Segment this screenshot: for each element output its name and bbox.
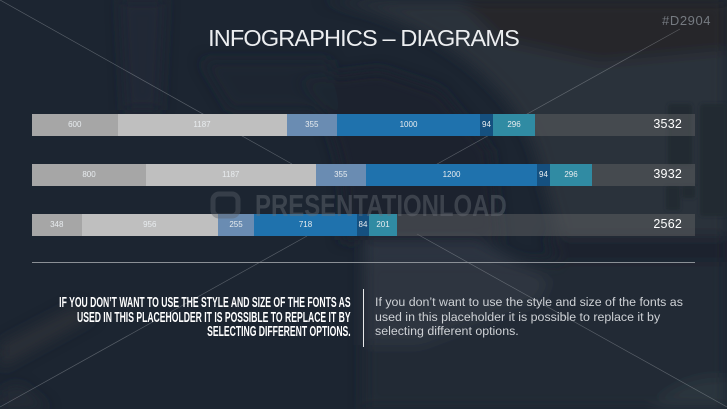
- segment 296: [493, 114, 535, 136]
- regular text block: [375, 295, 683, 338]
- segment 956: [82, 214, 218, 236]
- segment 201: 201: [376, 220, 390, 229]
- segment 296: 296: [564, 170, 578, 179]
- horizontal divider: [32, 262, 695, 263]
- segment 1187: [146, 164, 316, 186]
- segment 94: 94: [482, 120, 491, 129]
- segment 94: 94: [539, 170, 548, 179]
- segment 1200: [366, 164, 537, 186]
- segment 1000: [337, 114, 480, 136]
- segment 956: 956: [143, 220, 156, 229]
- watermark text: PRESENTATIONLOAD: [255, 188, 507, 223]
- segment 94: [537, 164, 550, 186]
- segment 1000: 1000: [400, 120, 417, 129]
- bar row 2: [32, 164, 695, 186]
- segment 296: [550, 164, 592, 186]
- vertical divider: [363, 289, 364, 347]
- segment 600: 600: [68, 120, 81, 129]
- segment 718: [254, 214, 357, 236]
- segment 355: [316, 164, 366, 186]
- segment 600: [32, 114, 118, 136]
- bold text block: IF YOU DON’T WANT TO USE THE STYLE AND SIZE OF THE FONTS AS: [60, 295, 351, 311]
- segment 255: 255: [229, 220, 243, 229]
- segment 1187: 1187: [222, 170, 239, 179]
- total 2562: 2562: [653, 217, 682, 231]
- segment 1187: [118, 114, 286, 136]
- keyboard keys: [666, 104, 727, 216]
- bar row 3: [32, 214, 695, 236]
- segment 84: 84: [359, 220, 367, 229]
- segment 1200: 1200: [443, 170, 460, 179]
- segment 201: [369, 214, 397, 236]
- segment 355: [286, 114, 337, 136]
- bar row 1: [32, 114, 695, 136]
- bold text block: USED IN THIS PLACEHOLDER IT IS POSSIBLE TO REPLACE IT BY: [77, 310, 351, 326]
- segment 94: [480, 114, 493, 136]
- segment 800: 800: [82, 170, 96, 179]
- watermark logo: [210, 188, 507, 223]
- title: INFOGRAPHICS – DIAGRAMS: [208, 25, 519, 51]
- regular text block: selecting different options.: [375, 324, 519, 338]
- regular text block: If you don’t want to use the style and size of the fonts as: [375, 295, 683, 309]
- bold text block: [60, 295, 351, 340]
- regular text block: used in this placeholder it is possible to replace it by: [375, 310, 660, 324]
- segment 84: [357, 214, 369, 236]
- total 3532: 3532: [653, 117, 682, 131]
- segment 355: 355: [334, 170, 347, 179]
- segment 296: 296: [507, 120, 521, 129]
- segment 1187: 1187: [193, 120, 211, 129]
- segment 348: [32, 214, 82, 236]
- segment 800: [32, 164, 146, 186]
- bold text block: SELECTING DIFFERENT OPTIONS.: [207, 324, 351, 340]
- watermark icon: [210, 192, 240, 218]
- segment 718: 718: [299, 220, 312, 229]
- segment 355: 355: [305, 120, 318, 129]
- product code label: #D2904: [662, 13, 711, 28]
- segment 348: 348: [50, 220, 63, 229]
- total 3932: 3932: [653, 167, 682, 181]
- segment 255: [218, 214, 254, 236]
